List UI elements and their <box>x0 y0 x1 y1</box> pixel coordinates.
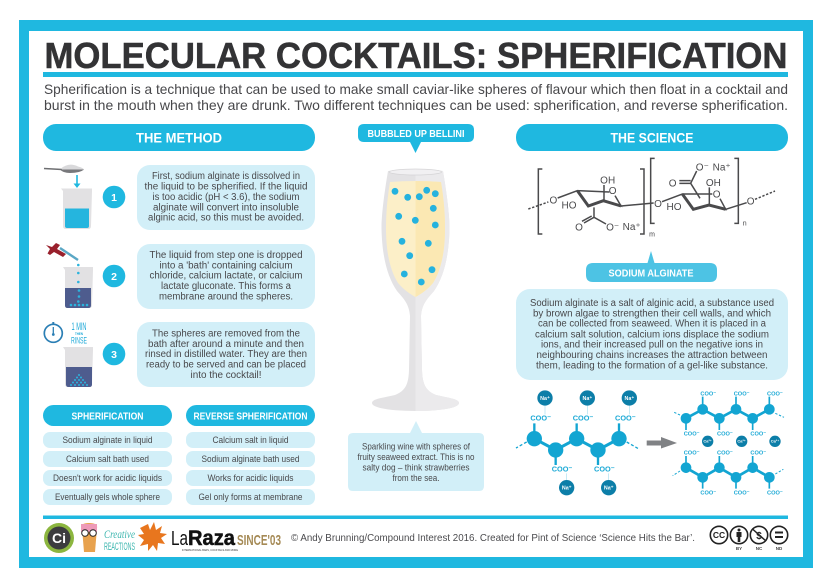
icons: creative commons licence: $ <box>756 531 762 542</box>
diagram: sodium alginate chain: Na⁺ <box>562 486 572 492</box>
diagram: sodium alginate chain: COO⁻ <box>530 414 551 423</box>
step 2 number: 2 <box>111 271 117 283</box>
icon: clock, rinse label and beaker: THEN <box>75 332 83 336</box>
heading: the method <box>43 124 315 151</box>
step 1 text: is too acidic (pH < 3.6), the sodium <box>152 192 300 203</box>
chemical structure: sodium alginate: O <box>747 196 755 207</box>
heading: reverse spherification: REVERSE SPHERIFICATION <box>194 410 308 422</box>
panel: reverse spherification table: Sodium alginate bath used <box>202 454 300 464</box>
logo: compound interest <box>44 523 74 553</box>
chemical structure: sodium alginate: HO <box>667 202 682 213</box>
intro text: burst in the mouth when they are drunk. Two different techniques can be used: spherification, and reverse spherification. <box>44 97 788 113</box>
step 1 text <box>137 165 315 230</box>
step 2 text: The liquid from step one is dropped <box>150 250 302 261</box>
text block: sodium alginate explanation: them, leading to the formation of a gel-like substance. <box>536 360 768 372</box>
text block: sodium alginate explanation: by brown algae to strengthen their cell walls, and which <box>533 308 771 319</box>
step 1 text: alginic acid, so this must be avoided. <box>148 212 304 224</box>
step 3 text: The spheres are removed from the <box>152 328 300 340</box>
chemical structure: sodium alginate: OH <box>706 178 721 189</box>
diagram: sodium alginate chain: Na⁺ <box>625 396 634 402</box>
diagram: calcium cross-linked chains: Ca²⁺ <box>737 439 746 444</box>
diagram: calcium cross-linked chains: COO⁻ <box>700 490 716 496</box>
text block: sodium alginate explanation <box>516 289 788 380</box>
icons: creative commons licence: ND <box>776 546 783 551</box>
diagram: calcium cross-linked chains: COO⁻ <box>684 431 700 437</box>
diagram: calcium cross-linked chains: Ca²⁺ <box>703 439 712 444</box>
step 1 number: 1 <box>111 192 117 204</box>
panel: spherification table <box>43 405 172 505</box>
logo: creative reactions <box>104 527 136 553</box>
step 3 number <box>103 343 125 365</box>
diagram: sodium alginate chain: COO⁻ <box>573 414 593 423</box>
diagram: calcium cross-linked chains: COO⁻ <box>767 391 783 397</box>
diagram: sodium alginate chain: Na⁺ <box>583 396 592 402</box>
callout: sparkling wine note: Sparkling wine with spheres of <box>362 442 470 452</box>
diagram: calcium cross-linked chains: COO⁻ <box>750 450 766 456</box>
step 2 text: into a 'bath' containing calcium <box>160 260 292 271</box>
diagram: calcium cross-linked chains: COO⁻ <box>684 450 700 456</box>
step 1 text: First, sodium alginate is dissolved in <box>152 171 300 182</box>
step 2 text <box>137 244 315 309</box>
title rule <box>43 72 788 77</box>
diagram: calcium cross-linked chains: COO⁻ <box>717 431 733 437</box>
logo: la raza since 03 <box>171 527 281 552</box>
logo: la raza since 03: SINCE'03 <box>237 532 281 549</box>
label: sodium alginate <box>586 251 717 282</box>
logo: la raza since 03: Raza <box>188 527 235 550</box>
icon: dropper and beaker <box>46 243 93 308</box>
logo: la raza since 03: INTERNATIONAL BARS, COCKTAILS AND MORE <box>182 548 238 552</box>
step 3 text <box>137 322 315 387</box>
chemical structure: sodium alginate: O⁻ <box>696 163 709 174</box>
diagram: calcium cross-linked chains: COO⁻ <box>767 490 783 496</box>
icon: clock, rinse label and beaker: 1 MIN <box>72 321 87 333</box>
step 2 text: lactate gluconate. This forms a <box>161 281 292 292</box>
chemical structure: sodium alginate: HO <box>562 201 577 212</box>
label: sodium alginate: SODIUM ALGINATE <box>608 268 694 280</box>
chemical structure: sodium alginate: O <box>654 199 662 210</box>
chemical structure: sodium alginate: O <box>549 196 557 207</box>
icon: clock, rinse label and beaker: RINSE <box>71 336 87 346</box>
heading: bubbled up bellini: BUBBLED UP BELLINI <box>368 129 465 140</box>
icons: creative commons licence: BY <box>736 546 742 551</box>
chemical structure: sodium alginate: O <box>713 190 721 201</box>
panel: reverse spherification table: Calcium salt in liquid <box>212 435 288 445</box>
panel: reverse spherification table: Works for acidic liquids <box>208 473 294 483</box>
diagram: sodium alginate chain: Na⁺ <box>604 486 614 492</box>
icons: creative commons licence <box>710 526 788 551</box>
step 3 text: bath after around a minute and then <box>148 339 304 350</box>
step 2 text: chloride, calcium lactate, or calcium <box>150 271 302 282</box>
panel: spherification table: Sodium alginate in liquid <box>62 435 152 445</box>
chemical structure: sodium alginate: O <box>609 186 617 197</box>
footer rule <box>43 516 788 519</box>
diagram: calcium cross-linked chains: COO⁻ <box>700 391 716 397</box>
title: MOLECULAR COCKTAILS: SPHERIFICATION <box>44 35 788 76</box>
diagram: sodium alginate chain: COO⁻ <box>615 414 636 423</box>
heading: the method: THE METHOD <box>136 130 222 146</box>
logo: creative reactions: Creative <box>104 527 136 541</box>
text: REACTIONS <box>104 541 135 553</box>
text block: sodium alginate explanation: Sodium alginate is a salt of alginic acid, a substance used <box>530 298 774 309</box>
chemical structure: sodium alginate: Na⁺ <box>713 163 731 174</box>
icons: creative commons licence: NC <box>756 546 763 551</box>
text block: sodium alginate explanation: can be collected from seaweed. When it is placed in a <box>538 319 767 330</box>
icons: creative commons licence: CC <box>713 530 725 540</box>
step 1 text: alginate will convert into insoluble <box>153 202 299 213</box>
chemical structure: sodium alginate <box>528 158 775 239</box>
spheres <box>392 187 439 285</box>
panel: spherification table: Calcium salt bath used <box>66 454 149 464</box>
arrow: chain transformation <box>647 437 677 448</box>
text block: sodium alginate explanation: neighbouring chains increases the attraction between <box>536 350 768 361</box>
icon: spoon and beaker <box>44 165 92 229</box>
intro text: Spherification is a technique that can be used to make small caviar-like spheres of flavour which then float in a cocktail and <box>44 81 788 97</box>
diagram: calcium cross-linked chains: COO⁻ <box>750 431 766 437</box>
copyright text: © Andy Brunning/Compound Interest 2016. Created for Pint of Science ‘Science Hits the Bar’. <box>291 532 695 544</box>
heading: spherification: SPHERIFICATION <box>72 410 144 422</box>
heading: the science: THE SCIENCE <box>610 130 694 146</box>
diagram: calcium cross-linked chains: COO⁻ <box>734 391 750 397</box>
callout: sparkling wine note: fruity seaweed extract. This is no <box>358 452 474 462</box>
icon: clock, rinse label and beaker <box>44 321 93 387</box>
diagram: sodium alginate chain <box>516 390 638 495</box>
diagram: sodium alginate chain: COO⁻ <box>594 465 615 474</box>
diagram: calcium cross-linked chains <box>673 391 784 496</box>
diagram: sodium alginate chain: Na⁺ <box>540 396 550 402</box>
logo: pint of science <box>81 523 97 552</box>
illustration: champagne glass <box>372 169 459 411</box>
step 1 number <box>103 186 125 208</box>
panel: spherification table: Eventually gels whole sphere <box>55 492 160 502</box>
chemical structure: sodium alginate: OH <box>600 175 615 186</box>
panel: the method <box>43 124 315 387</box>
logo: compound interest: Ci <box>52 530 66 546</box>
chemical structure: sodium alginate: m <box>649 232 655 239</box>
logo: la raza since 03: La <box>171 528 189 550</box>
step 2 text: membrane around the spheres. <box>159 291 293 302</box>
diagram: sodium alginate chain: COO⁻ <box>552 465 572 474</box>
heading: bubbled up bellini <box>358 124 474 153</box>
panel: reverse spherification table: Gel only forms at membrane <box>198 492 302 502</box>
panel: spherification table: Doesn't work for acidic liquids <box>53 473 162 483</box>
text block: sodium alginate explanation: calcium salt solution, calcium ions displace the sodium <box>535 329 769 340</box>
step 3 text: rinsed in distilled water. They are then <box>145 349 307 360</box>
chemical structure: sodium alginate: O⁻ <box>606 222 619 233</box>
step 3 number: 3 <box>111 349 117 361</box>
text block: sodium alginate explanation: ions, and their increased pull on the negative ions in <box>541 340 763 351</box>
chemical structure: sodium alginate: O <box>575 222 583 233</box>
diagram: calcium cross-linked chains: COO⁻ <box>734 490 750 496</box>
diagram: calcium cross-linked chains: Ca²⁺ <box>771 439 779 444</box>
heading: the science <box>516 124 788 151</box>
chemical structure: sodium alginate: n <box>743 221 747 228</box>
step 2 number <box>103 265 125 287</box>
callout: sparkling wine note: salty dog – think strawberries <box>362 462 470 472</box>
step 1 text: the liquid to be spherified. If the liquid <box>144 182 308 192</box>
chemical structure: sodium alginate: Na⁺ <box>623 222 641 233</box>
step 3 text: ready to be served and can be placed <box>146 360 306 370</box>
chemical structure: sodium alginate: O <box>669 178 677 189</box>
callout: sparkling wine note: from the sea. <box>392 473 440 483</box>
step 3 text: into the cocktail! <box>190 370 262 381</box>
logo: orange splat <box>138 522 167 551</box>
intro text <box>44 81 788 113</box>
diagram: calcium cross-linked chains: COO⁻ <box>717 450 733 456</box>
panel: reverse spherification table <box>186 405 315 505</box>
callout: sparkling wine note <box>348 421 484 491</box>
